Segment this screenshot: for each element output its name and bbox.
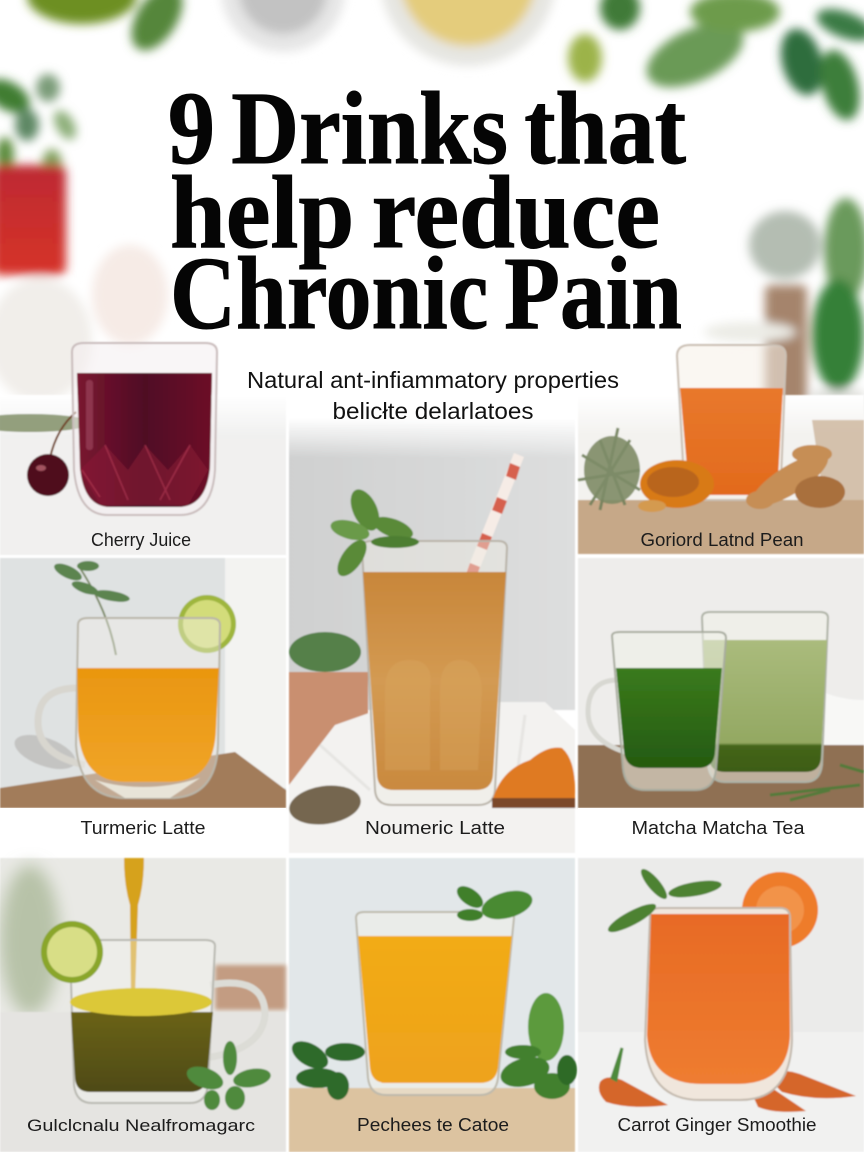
panel: middle latte bbox=[287, 418, 575, 853]
panel: golden juice bbox=[287, 858, 577, 1152]
icon: leaves right bbox=[497, 993, 577, 1099]
icon: carrots on table bbox=[599, 1048, 856, 1112]
label: pouring mug: Gulclcnalu Nealfromagarc bbox=[27, 1116, 256, 1135]
icon: seeds bbox=[287, 781, 363, 829]
panel: cherry juice bbox=[0, 343, 286, 555]
icon: pour stream bbox=[124, 858, 144, 995]
icon: striped straw bbox=[465, 453, 524, 578]
icon: green tea mug bbox=[588, 632, 726, 790]
icon: turmeric latte mug bbox=[38, 618, 220, 798]
label: carrot ginger smoothie: Carrot Ginger Smoothie bbox=[618, 1115, 816, 1135]
panel: matcha tea bbox=[578, 558, 864, 855]
icon: lime slice bbox=[178, 595, 236, 653]
title: Chronic Pain bbox=[170, 236, 682, 351]
label: turmeric ginger: Goriord Latnd Pean bbox=[640, 530, 804, 550]
icon: glass of cherry juice bbox=[72, 343, 217, 515]
subtitle bbox=[247, 367, 619, 424]
icon: matcha glass bbox=[702, 612, 828, 782]
icon: mint sprig bbox=[184, 1041, 272, 1110]
panel: turmeric ginger top right bbox=[578, 345, 864, 554]
panel: pouring mug bbox=[0, 858, 286, 1152]
icon: table herbs bbox=[770, 765, 864, 800]
icon: terracotta pot bbox=[289, 632, 368, 790]
caption strip: matcha tea bbox=[578, 808, 864, 855]
caption strip: turmeric latte bbox=[0, 808, 286, 855]
icon: orange glass bbox=[677, 345, 786, 500]
icon: carrot slice bbox=[742, 872, 818, 948]
icon: spoon bbox=[10, 728, 80, 776]
subtitle: belicłte delarlatoes bbox=[332, 398, 534, 424]
blurred header decoration bbox=[0, 0, 864, 435]
icon: leaves on glass bbox=[605, 866, 723, 937]
icon: lime slice bbox=[41, 921, 103, 983]
icon: turmeric piece bbox=[492, 748, 575, 808]
title bbox=[168, 71, 686, 351]
label: middle latte: Noumeric Latte bbox=[365, 818, 505, 838]
icon: turmeric root bbox=[638, 460, 714, 512]
icon: herb sprig bbox=[52, 560, 131, 655]
label: matcha tea: Matcha Matcha Tea bbox=[632, 818, 806, 838]
white cloth bbox=[289, 702, 575, 853]
icon: mint on glass bbox=[453, 882, 535, 924]
icon: leaves left bbox=[287, 1035, 365, 1100]
title: help reduce bbox=[170, 155, 660, 270]
label: cherry juice: Cherry Juice bbox=[91, 530, 191, 550]
title: 9 Drinks that bbox=[168, 71, 686, 186]
icon: herbs bbox=[578, 428, 640, 510]
label: turmeric latte: Turmeric Latte bbox=[80, 818, 206, 838]
icon: olive drink mug bbox=[70, 940, 265, 1103]
panel: turmeric latte bbox=[0, 558, 286, 855]
subtitle: Natural ant-infiammatory properties bbox=[247, 367, 619, 393]
icon: ginger root bbox=[745, 445, 845, 515]
icon: cherry bbox=[27, 412, 76, 496]
icon: latte glass bbox=[362, 541, 507, 805]
icon: golden glass bbox=[356, 912, 514, 1095]
icon: carrot smoothie glass bbox=[645, 908, 792, 1100]
panel: carrot ginger smoothie bbox=[578, 858, 864, 1152]
label: golden juice: Pechees te Catoe bbox=[357, 1115, 509, 1135]
icon: mint sprig bbox=[328, 485, 419, 581]
